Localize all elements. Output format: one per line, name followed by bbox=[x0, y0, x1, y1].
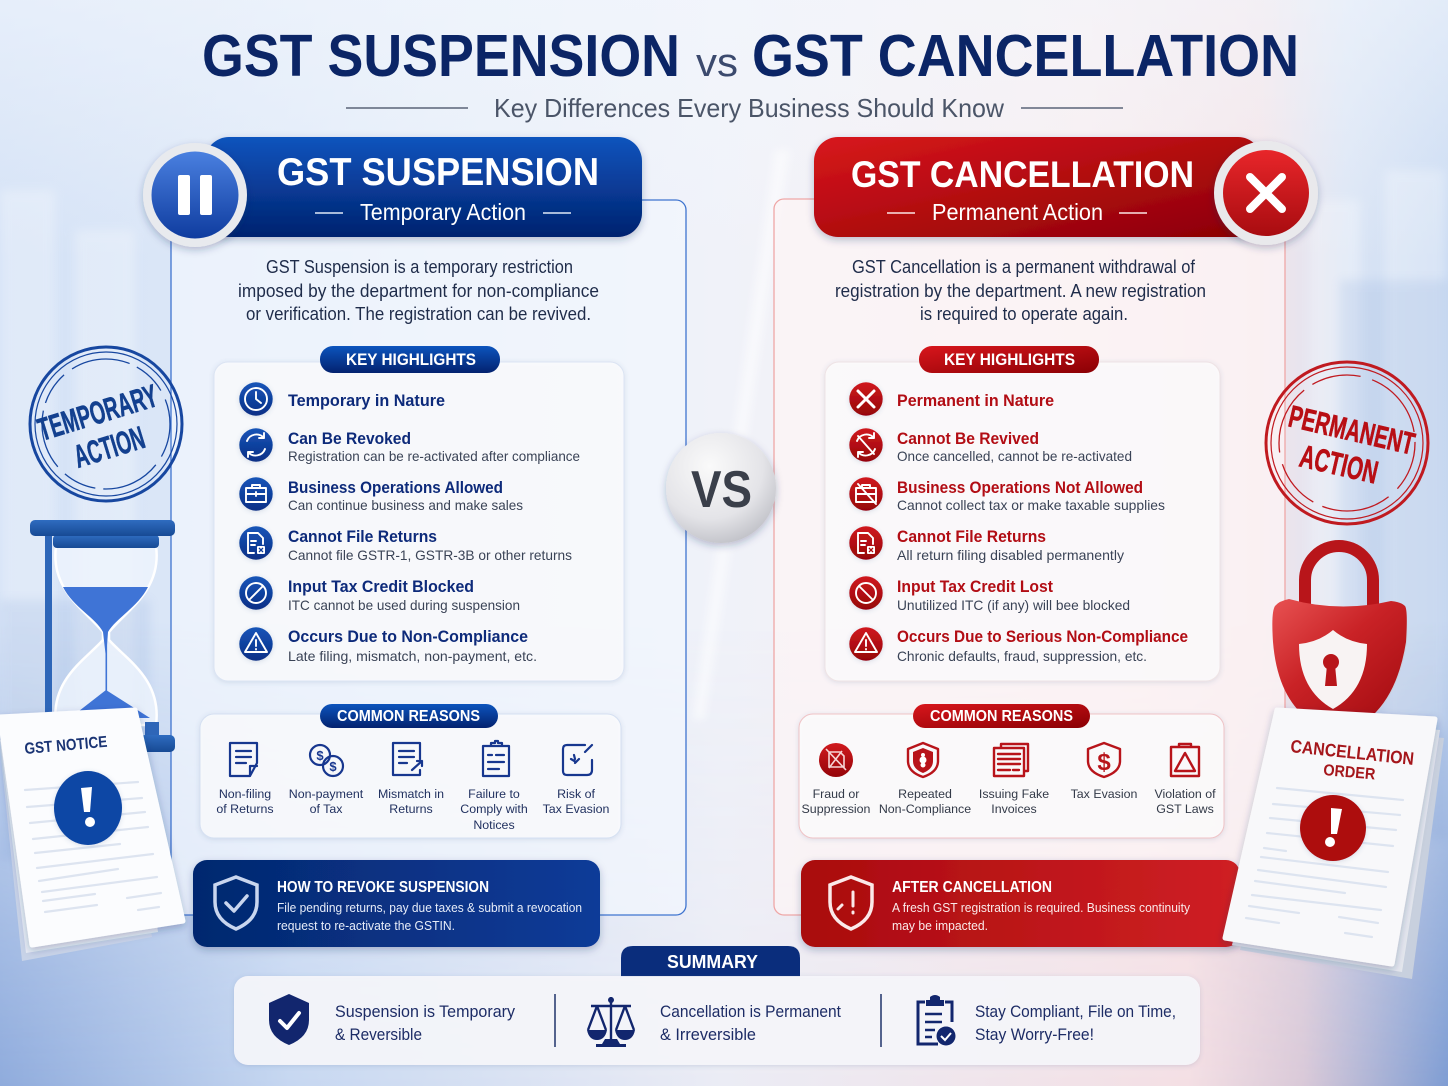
reason: mismatch in returns: Mismatch in bbox=[378, 787, 444, 801]
reason: repeated non-compliance bbox=[879, 743, 971, 816]
reason: non-payment of tax bbox=[289, 745, 364, 816]
reason: violation of GST laws bbox=[1154, 744, 1216, 816]
reason: violation of GST laws: GST Laws bbox=[1156, 802, 1214, 816]
reason: risk of tax evasion: Risk of bbox=[557, 787, 595, 801]
icon: padlock bbox=[1272, 546, 1407, 718]
subtitle: Key Differences Every Business Should Know bbox=[494, 93, 1004, 123]
GST notice document bbox=[0, 710, 183, 961]
reason: mismatch in returns bbox=[378, 743, 444, 816]
title: GST SUSPENSION bbox=[202, 23, 680, 89]
reason: failure to comply with notices: Notices bbox=[473, 818, 515, 832]
stamp: permanent action: ACTION bbox=[1296, 438, 1381, 491]
stamp: temporary action bbox=[30, 347, 182, 501]
cancellation order document: ORDER bbox=[1323, 762, 1376, 784]
key highlights: cancellation bbox=[825, 346, 1220, 681]
item: temporary in nature bbox=[239, 382, 445, 416]
description: suspension bbox=[238, 257, 599, 324]
summary: stay compliant bbox=[918, 995, 1176, 1046]
item: permanent in nature: Permanent in Nature bbox=[897, 391, 1054, 410]
item: input tax credit lost: Unutilized ITC (if any) will bee blocked bbox=[897, 597, 1130, 613]
summary: suspension is temporary: & Reversible bbox=[335, 1025, 422, 1044]
heading: common reasons: COMMON REASONS bbox=[337, 708, 480, 725]
title: vs bbox=[696, 41, 738, 85]
item: business operations allowed: Business Operations Allowed bbox=[288, 478, 503, 497]
reason: issuing fake invoices: Invoices bbox=[991, 802, 1037, 816]
stamp: temporary action: TEMPORARY bbox=[34, 377, 162, 448]
reason: failure to comply with notices: Comply with bbox=[460, 802, 528, 816]
description: cancellation: registration by the department. A new registration bbox=[835, 281, 1206, 301]
item: input tax credit lost: Input Tax Credit Lost bbox=[897, 577, 1053, 596]
heading: key highlights bbox=[320, 346, 500, 373]
item: business operations not allowed: Cannot collect tax or make taxable supplies bbox=[897, 497, 1165, 513]
VS badge bbox=[666, 433, 776, 543]
item: can be revoked bbox=[239, 428, 580, 464]
reason: tax evasion: Tax Evasion bbox=[1071, 787, 1138, 801]
item: permanent in nature bbox=[849, 382, 1054, 416]
summary: suspension is temporary bbox=[269, 994, 515, 1045]
reason: fraud or suppression bbox=[802, 743, 871, 816]
item: occurs due to serious non-compliance: Occurs Due to Serious Non-Compliance bbox=[897, 627, 1188, 646]
callout: after cancellation: may be impacted. bbox=[892, 918, 988, 933]
callout: how to revoke suspension: File pending returns, pay due taxes & submit a revocation bbox=[277, 900, 582, 915]
panel: GST cancellation bbox=[774, 137, 1318, 947]
reason: failure to comply with notices bbox=[460, 741, 528, 832]
icon: pause bbox=[143, 143, 247, 247]
panel: GST suspension bbox=[143, 137, 686, 947]
item: occurs due to non-compliance bbox=[239, 627, 537, 664]
item: temporary in nature: Temporary in Nature bbox=[288, 391, 445, 410]
description: cancellation bbox=[835, 257, 1206, 324]
title: GST CANCELLATION bbox=[752, 23, 1299, 89]
description: cancellation: is required to operate again. bbox=[920, 304, 1128, 324]
reason: failure to comply with notices: Failure to bbox=[468, 787, 520, 801]
reason: risk of tax evasion bbox=[543, 745, 610, 816]
header: GST cancellation bbox=[814, 137, 1262, 237]
reason: tax evasion bbox=[1071, 743, 1138, 801]
item: cannot be revived bbox=[849, 428, 1132, 464]
reason: violation of GST laws: Violation of bbox=[1154, 787, 1216, 801]
reason: repeated non-compliance: Non-Compliance bbox=[879, 802, 971, 816]
header: GST cancellation: Permanent Action bbox=[932, 199, 1103, 225]
reason: repeated non-compliance: Repeated bbox=[898, 787, 952, 801]
item: can be revoked: Registration can be re-activated after compliance bbox=[288, 448, 580, 464]
summary: cancellation is permanent bbox=[587, 997, 841, 1047]
callout: after cancellation bbox=[801, 860, 1240, 947]
header: GST cancellation: GST CANCELLATION bbox=[851, 154, 1194, 195]
reason: non-filing of returns: of Returns bbox=[216, 802, 274, 816]
heading: common reasons bbox=[913, 704, 1090, 728]
callout: how to revoke suspension bbox=[193, 860, 600, 947]
item: occurs due to serious non-compliance: Chronic defaults, fraud, suppression, etc. bbox=[897, 648, 1147, 664]
callout: after cancellation: AFTER CANCELLATION bbox=[892, 879, 1052, 896]
stamp: temporary action: ACTION bbox=[70, 419, 149, 475]
item: cannot file returns bbox=[239, 526, 572, 563]
item: business operations not allowed: Business Operations Not Allowed bbox=[897, 478, 1143, 497]
reason: non-filing of returns: Non-filing bbox=[219, 787, 271, 801]
panel: summary bbox=[234, 946, 1200, 1065]
description: cancellation: GST Cancellation is a permanent withdrawal of bbox=[852, 257, 1196, 277]
common reasons: cancellation bbox=[799, 704, 1224, 838]
common reasons: suspension bbox=[200, 704, 621, 838]
item: cannot file returns: Cannot File Returns bbox=[897, 527, 1046, 546]
reason: non-filing of returns bbox=[216, 743, 274, 816]
reason: non-payment of tax: Non-payment bbox=[289, 787, 364, 801]
reason: mismatch in returns: Returns bbox=[389, 802, 433, 816]
icon: cross bbox=[1214, 141, 1318, 245]
summary: cancellation is permanent: Cancellation is Permanent bbox=[660, 1002, 841, 1021]
VS badge: VS bbox=[691, 461, 752, 519]
description: suspension: imposed by the department for non-compliance bbox=[238, 281, 599, 301]
cancellation order document: CANCELLATION bbox=[1290, 736, 1415, 769]
heading: key highlights: KEY HIGHLIGHTS bbox=[346, 350, 476, 369]
stamp: permanent action bbox=[1266, 362, 1428, 524]
callout: how to revoke suspension: request to re-activate the GSTIN. bbox=[277, 918, 455, 933]
item: input tax credit blocked: ITC cannot be used during suspension bbox=[288, 597, 520, 613]
item: input tax credit blocked bbox=[239, 576, 520, 613]
reason: non-payment of tax: $ bbox=[316, 748, 324, 763]
item: cannot file returns: All return filing disabled permanently bbox=[897, 547, 1124, 563]
item: occurs due to non-compliance: Late filing, mismatch, non-payment, etc. bbox=[288, 648, 537, 664]
GST notice document: GST NOTICE bbox=[24, 734, 108, 758]
reason: issuing fake invoices: Issuing Fake bbox=[979, 787, 1049, 801]
item: business operations not allowed bbox=[849, 477, 1165, 513]
header: GST suspension bbox=[205, 137, 642, 237]
item: occurs due to serious non-compliance bbox=[849, 627, 1188, 664]
item: occurs due to non-compliance: Occurs Due to Non-Compliance bbox=[288, 627, 528, 646]
heading: common reasons: COMMON REASONS bbox=[930, 708, 1073, 725]
reason: tax evasion: $ bbox=[1097, 749, 1111, 776]
item: cannot file returns: Cannot File Returns bbox=[288, 527, 437, 546]
key highlights: suspension bbox=[214, 346, 624, 681]
heading: common reasons bbox=[320, 704, 498, 728]
summary: stay compliant: Stay Compliant, File on Time, bbox=[975, 1002, 1176, 1021]
reason: fraud or suppression: Fraud or bbox=[813, 787, 859, 801]
item: business operations allowed: Can continue business and make sales bbox=[288, 497, 523, 513]
item: cannot file returns bbox=[849, 526, 1124, 563]
summary: cancellation is permanent: & Irreversible bbox=[660, 1025, 756, 1044]
header: GST suspension: GST SUSPENSION bbox=[277, 151, 599, 194]
item: cannot file returns: Cannot file GSTR-1, GSTR-3B or other returns bbox=[288, 547, 572, 563]
item: business operations allowed bbox=[239, 477, 523, 513]
summary: stay compliant: Stay Worry-Free! bbox=[975, 1025, 1094, 1044]
reason: non-payment of tax: $ bbox=[329, 759, 337, 774]
cancellation order document bbox=[1225, 710, 1444, 979]
reason: issuing fake invoices bbox=[979, 744, 1049, 816]
title bbox=[202, 23, 1299, 89]
heading: key highlights: KEY HIGHLIGHTS bbox=[944, 350, 1075, 369]
reason: non-payment of tax: of Tax bbox=[310, 802, 343, 816]
callout: how to revoke suspension: HOW TO REVOKE SUSPENSION bbox=[277, 879, 489, 896]
heading: summary bbox=[621, 946, 800, 977]
item: cannot be revived: Once cancelled, cannot be re-activated bbox=[897, 448, 1132, 464]
item: can be revoked: Can Be Revoked bbox=[288, 429, 411, 448]
reason: fraud or suppression: Suppression bbox=[802, 802, 871, 816]
heading: summary: SUMMARY bbox=[667, 952, 758, 972]
item: cannot be revived: Cannot Be Revived bbox=[897, 429, 1039, 448]
header: GST suspension: Temporary Action bbox=[360, 199, 526, 225]
item: input tax credit blocked: Input Tax Credit Blocked bbox=[288, 577, 474, 596]
item: input tax credit lost bbox=[849, 576, 1130, 613]
callout: after cancellation: A fresh GST registration is required. Business continuity bbox=[892, 900, 1190, 915]
summary: suspension is temporary: Suspension is Temporary bbox=[335, 1002, 515, 1021]
description: suspension: GST Suspension is a temporary restriction bbox=[266, 257, 573, 277]
heading: key highlights bbox=[919, 346, 1099, 373]
reason: risk of tax evasion: Tax Evasion bbox=[543, 802, 610, 816]
description: suspension: or verification. The registration can be revived. bbox=[246, 304, 591, 324]
icon: hourglass bbox=[30, 520, 175, 752]
